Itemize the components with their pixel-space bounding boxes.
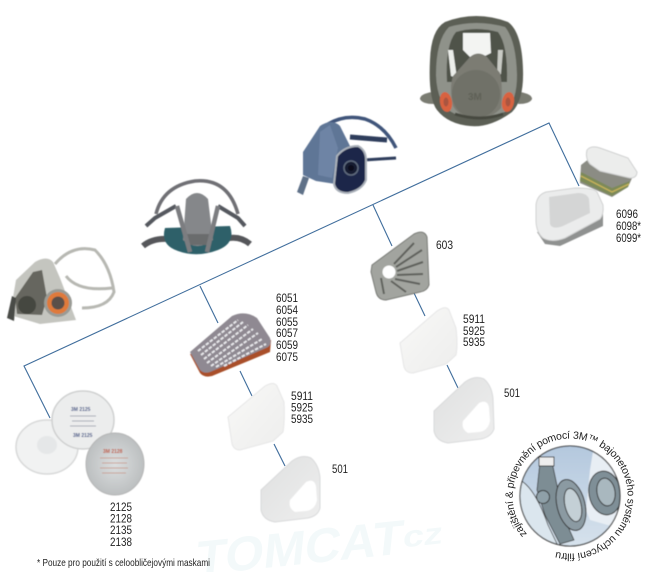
icon: 5911 filter pad right	[400, 308, 457, 373]
label: 5911 series codes left: 5925	[291, 402, 313, 414]
label: 2125 series codes: 2128	[110, 514, 132, 526]
label: 6051 series codes	[276, 293, 299, 364]
label: 5911 series codes right: 5925	[463, 326, 485, 338]
label: 501 right: 501	[504, 388, 520, 400]
label: 6096 series codes	[616, 209, 641, 245]
watermark: TOMCAT cz: cz	[401, 517, 445, 555]
label: 2125 series codes: 2125	[110, 502, 132, 514]
label: 5911 series codes left	[291, 391, 313, 426]
label: 6051 series codes: 6054	[276, 305, 299, 317]
label: 501 left: 501	[332, 464, 348, 476]
icon: 501 retainer left	[261, 457, 320, 522]
label: 6051 series codes: 6055	[276, 317, 298, 329]
icon: 6096 combination cartridges	[536, 147, 637, 246]
icon: 603 adapter	[371, 232, 429, 300]
label: 6051 series codes: 6051	[276, 293, 298, 305]
label: 2125 series codes	[110, 502, 132, 549]
icon: 5911 filter pad left	[228, 384, 284, 450]
label: 603: 603	[436, 240, 453, 252]
badge illustration	[518, 444, 622, 548]
label: 5911 series codes right: 5911	[463, 314, 485, 326]
badge: bayonet attachment system	[505, 430, 634, 562]
icon: 2125 particulate filter discs: 3M 2128	[103, 449, 123, 455]
label: 6051 series codes: 6057	[276, 328, 298, 340]
icon: half mask quick latch teal	[143, 181, 250, 254]
connector lines: main branch	[24, 123, 579, 466]
label: 5911 series codes left: 5935	[291, 414, 313, 426]
label: 5911 series codes right	[463, 314, 485, 349]
icon: full face mask: 3M	[468, 92, 482, 103]
icon: 2125 particulate filter discs: 3M 2125	[73, 433, 93, 439]
icon: 501 retainer right	[434, 378, 494, 443]
label: 5911 series codes left: 5911	[291, 391, 313, 403]
label: 5911 series codes right: 5935	[463, 337, 485, 349]
label: 2125 series codes: 2135	[110, 525, 132, 537]
icon: full face mask	[420, 16, 532, 126]
label: 6096 series codes: 6099*	[616, 233, 641, 245]
label: 6051 series codes: 6075	[276, 352, 298, 364]
icon: 2125 particulate filter discs	[16, 391, 144, 495]
icon: 2125 particulate filter discs: 3M 2125	[71, 407, 91, 413]
footnote: * Pouze pro použití s celoobličejovými maskami	[37, 557, 210, 569]
icon: 6051 gas cartridge	[190, 313, 271, 377]
label: 6096 series codes: 6098*	[616, 221, 641, 233]
badge curved text: zajištění & připevnění pomocí 3M™ bajonetového systému uchycení filtru	[505, 430, 634, 562]
icon: half mask 7500 blue	[297, 117, 396, 195]
label: 2125 series codes: 2138	[110, 537, 132, 549]
label: 6096 series codes: 6096	[616, 209, 638, 221]
icon: half mask 6000 grey	[7, 249, 114, 324]
label: 6051 series codes: 6059	[276, 340, 298, 352]
